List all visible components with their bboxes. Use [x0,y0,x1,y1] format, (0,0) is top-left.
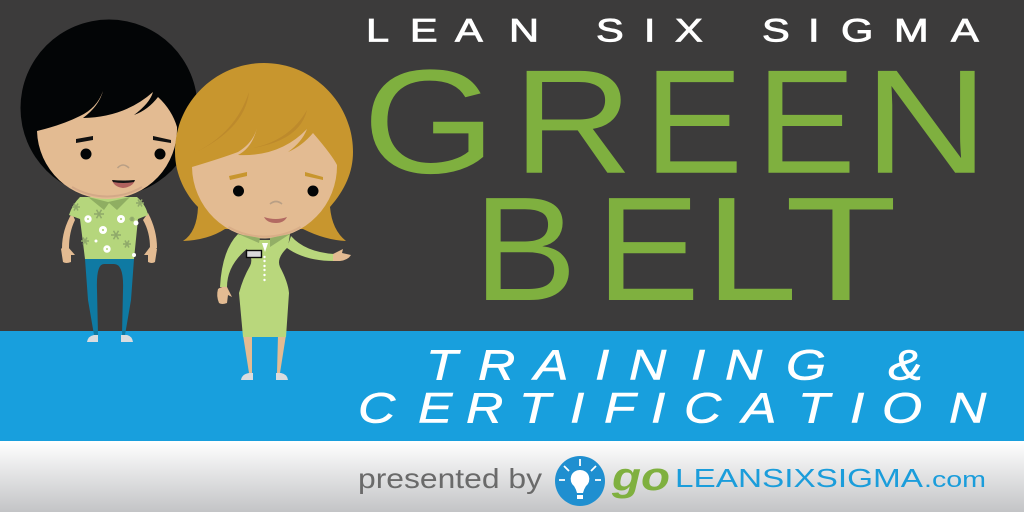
dress buttons [262,243,268,281]
heading: Belt: T [785,167,897,332]
woman chin shadow [228,227,300,237]
woman legs [243,335,286,373]
woman hand left [217,287,232,304]
man shoes [87,335,133,342]
man arms [62,213,157,248]
heading: Certification: CERTIFICATION [358,384,987,432]
woman hand right [333,249,351,261]
heading: Green: R [513,40,633,205]
panel: dark background [0,0,1024,331]
heading: Green [362,38,989,205]
logo: go: go [611,455,670,499]
woman shoes [241,373,288,380]
man eyebrows [76,136,171,143]
heading: Green: N [864,39,989,205]
woman arm left [220,234,248,287]
man hands [61,247,157,263]
woman mouth [264,217,287,223]
panel: blue band [0,331,1024,441]
man legs [85,259,134,335]
man mouth [112,180,135,188]
character: woman [175,63,353,380]
man nose [118,165,129,168]
man chin shadow [72,187,142,196]
name badge [246,250,262,258]
shirt asterisks [72,200,144,248]
character: man [20,20,198,342]
panel: footer strip [0,441,1024,512]
woman eyebrows [229,172,323,180]
man face [37,91,177,199]
man hair [20,20,198,196]
hair highlights [190,92,307,155]
text: presented by: presented by [358,463,542,494]
flower centres [87,218,122,250]
heading: Belt: L [705,167,797,332]
woman arm right [287,236,334,261]
woman collar [238,234,290,247]
woman hair [175,63,353,241]
heading: Green: G [362,39,496,204]
woman dress [238,234,290,337]
logo: leansixsigma: LEANSIXSIGMA [675,463,924,493]
shirt collar [88,197,130,210]
heading: Belt: E [596,167,700,332]
heading: Belt: B [473,167,577,332]
logo: dot com: .com [924,467,986,492]
heading: Training &: TRAINING & [426,341,923,389]
heading: Green: E [644,40,743,205]
woman nose [270,202,282,204]
man eyes [80,148,92,160]
heading: Lean Six Sigma: LEAN SIX SIGMA [366,12,979,48]
shirt flowers [84,215,138,257]
man shirt [69,197,148,259]
heading: Green: E [756,38,856,205]
heading: Belt [473,167,897,332]
woman face [192,128,337,239]
woman eyes [233,186,244,196]
icon: lightbulb logo [555,456,605,506]
